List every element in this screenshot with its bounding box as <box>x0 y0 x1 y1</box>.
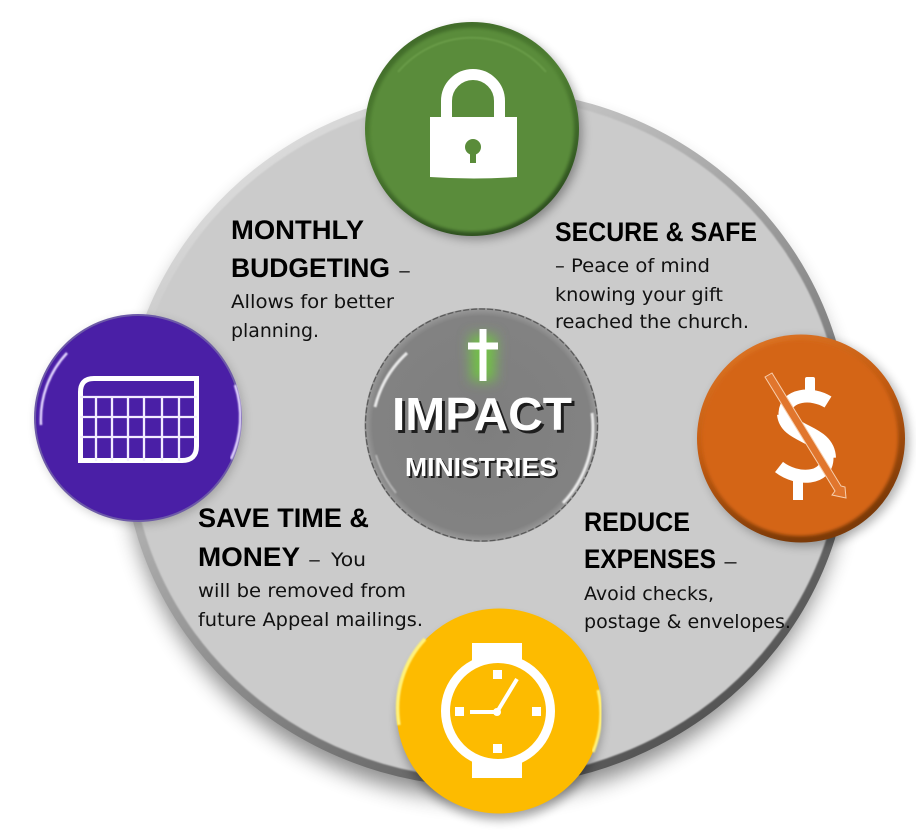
text block: save time and money: MONEY <box>198 542 300 572</box>
text block: monthly budgeting: MONTHLY <box>231 215 364 245</box>
text block: reduce expenses: postage & envelopes. <box>584 611 791 633</box>
text block: save time and money: You <box>330 549 366 571</box>
icon: orange dollar button <box>697 334 909 546</box>
text block: save time and money: will be removed from <box>198 580 406 602</box>
icon: yellow watch button <box>396 608 602 820</box>
text block: monthly budgeting: Allows for better <box>231 291 394 313</box>
text block: monthly budgeting: planning. <box>231 320 319 342</box>
text block: reduce expenses <box>584 507 791 633</box>
text block: monthly budgeting <box>231 215 411 342</box>
panel: large grey disc <box>122 89 850 799</box>
heading: MINISTRIES: MINISTRIES <box>407 454 559 484</box>
text block: secure and safe: knowing your gift <box>555 284 723 306</box>
text block: save time and money: future Appeal mailings. <box>198 609 423 631</box>
icon: downward arrow striking the dollar <box>765 373 846 498</box>
text block: save time and money <box>198 503 423 631</box>
icon: green padlock button <box>365 22 582 239</box>
heading: MINISTRIES: MINISTRIES <box>405 452 557 482</box>
icon: glowing cross <box>468 329 498 381</box>
text block: monthly budgeting: BUDGETING <box>231 253 390 283</box>
text block: secure and safe: SECURE & SAFE <box>555 217 757 247</box>
text block: reduce expenses: Avoid checks, <box>584 583 714 605</box>
heading: IMPACT: IMPACT <box>392 388 572 440</box>
text block: reduce expenses: – <box>723 551 738 573</box>
panel: centre Impact Ministries badge <box>364 308 598 542</box>
text block: reduce expenses: REDUCE <box>584 507 690 537</box>
text block: reduce expenses: EXPENSES <box>584 544 716 574</box>
text block: secure and safe: – Peace of mind <box>555 255 710 277</box>
text block: monthly budgeting: – <box>398 260 411 282</box>
text block: save time and money: SAVE TIME & <box>198 503 369 533</box>
icon: purple calendar button <box>34 314 243 524</box>
text block: save time and money: – <box>308 549 321 571</box>
heading: IMPACT: IMPACT <box>395 391 575 443</box>
text block: secure and safe <box>555 217 757 333</box>
text block: secure and safe: reached the church. <box>555 311 749 333</box>
